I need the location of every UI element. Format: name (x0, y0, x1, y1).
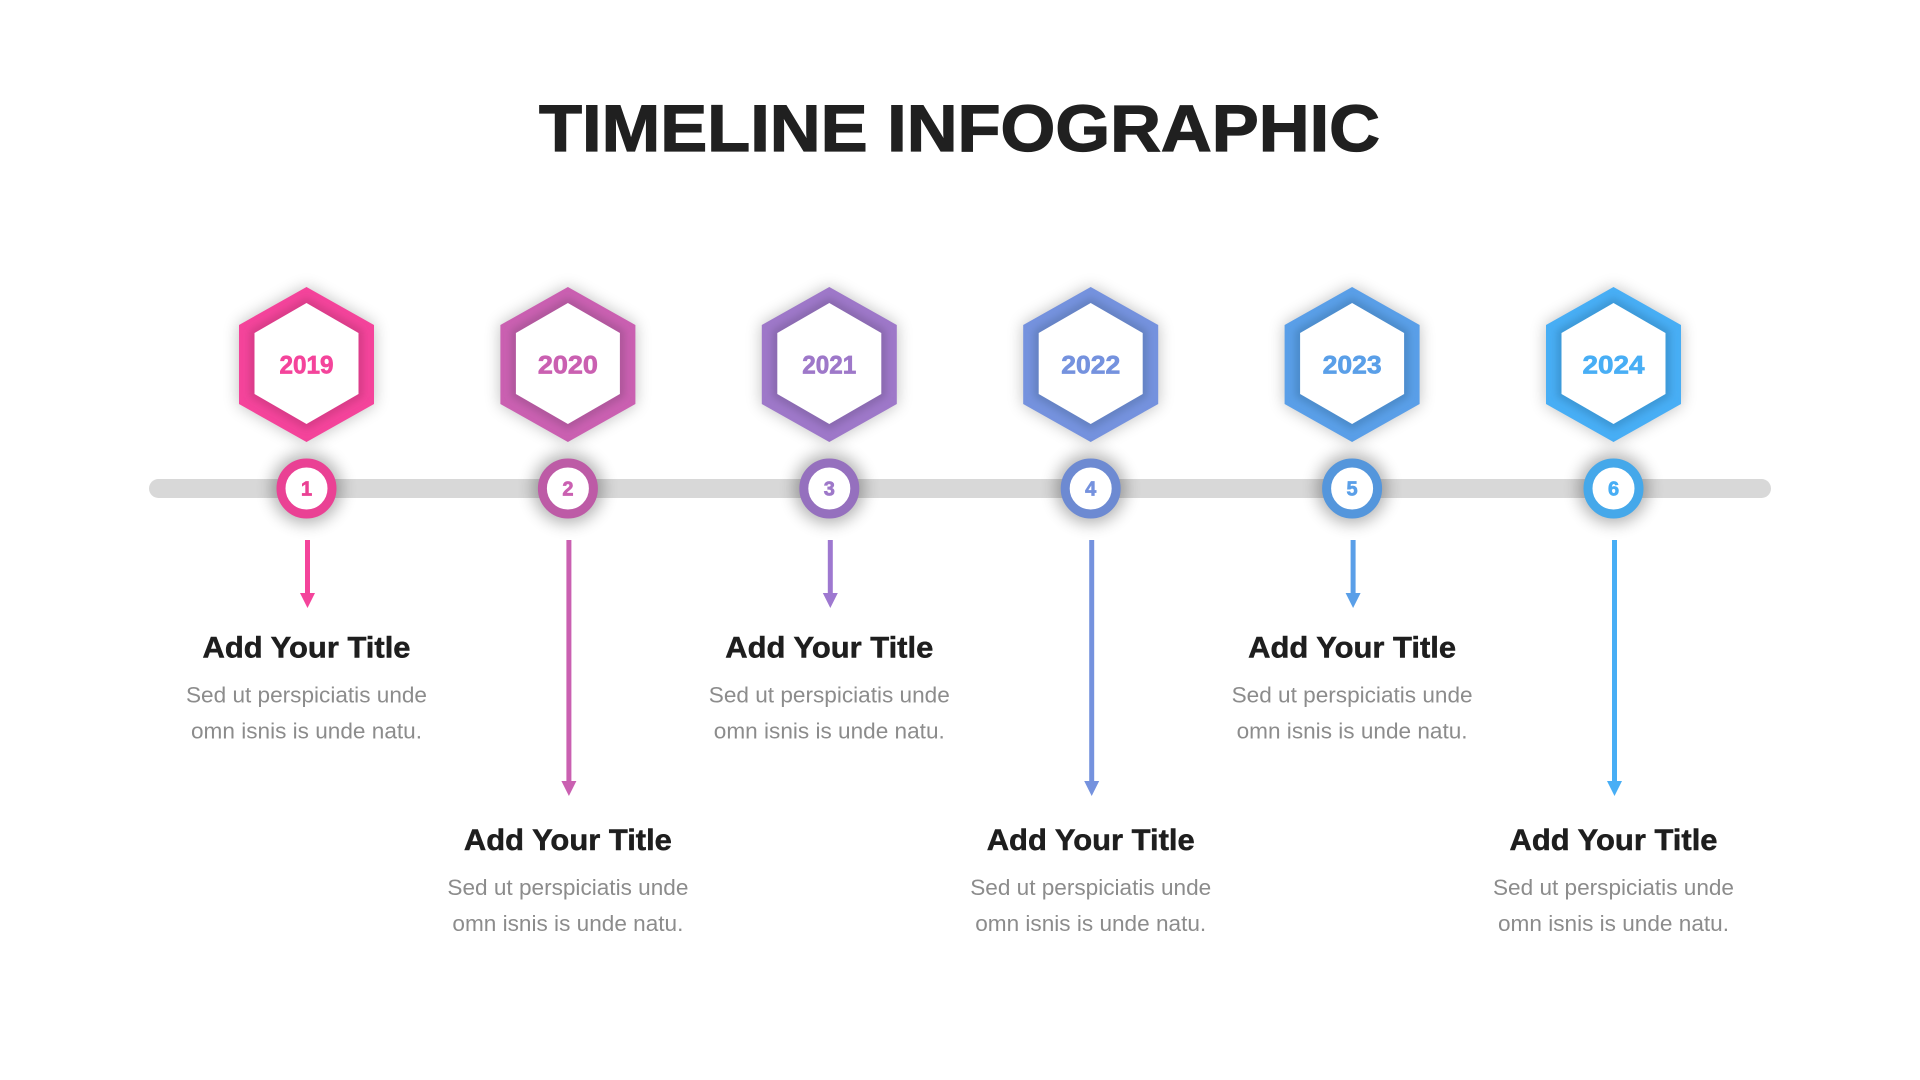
step 2: 2020 (447, 287, 688, 936)
description (1232, 682, 1473, 744)
description: Sed ut perspiciatis unde (1493, 875, 1734, 900)
year label: 2019 (280, 352, 334, 380)
arrow (823, 540, 838, 608)
year label: 2021 (802, 352, 856, 380)
numbered node 6 (1578, 454, 1648, 524)
year label: 2022 (1061, 352, 1120, 380)
hexagon badge 2023 (1285, 287, 1420, 442)
description: Sed ut perspiciatis unde (447, 875, 688, 900)
description (709, 682, 950, 744)
step 5: 2023 (1232, 287, 1473, 744)
numbered node 3: 3 (824, 478, 835, 500)
infographic canvas (149, 104, 1771, 931)
numbered node 4: 4 (1085, 478, 1097, 500)
year label: 2023 (1323, 352, 1382, 380)
description (1493, 875, 1734, 936)
step 4: 2022 (970, 287, 1211, 936)
description: omn isnis is unde natu. (714, 718, 945, 744)
numbered node 2: 2 (562, 478, 573, 500)
numbered node 6: 6 (1608, 478, 1619, 500)
numbered node 5 (1317, 454, 1387, 524)
hexagon badge 2022 (1023, 287, 1158, 442)
arrow (1084, 540, 1099, 796)
description: Sed ut perspiciatis unde (1232, 682, 1473, 708)
hexagon badge 2019 (239, 287, 374, 442)
description: Sed ut perspiciatis unde (186, 682, 427, 708)
heading: Add Your Title (1510, 824, 1718, 857)
heading: Add Your Title (725, 632, 933, 664)
numbered node 1 (272, 454, 342, 524)
description (970, 875, 1211, 936)
description (186, 682, 427, 744)
heading: Add Your Title (987, 824, 1195, 857)
arrow (561, 540, 576, 796)
description: omn isnis is unde natu. (191, 718, 422, 744)
step 3: 2021 (709, 287, 950, 744)
heading: Add Your Title (464, 824, 672, 857)
numbered node 1: 1 (301, 478, 312, 500)
step 6: 2024 (1493, 287, 1734, 936)
heading: Add Your Title (1248, 632, 1456, 664)
description: omn isnis is unde natu. (1237, 718, 1468, 744)
description: Sed ut perspiciatis unde (970, 875, 1211, 900)
description (447, 875, 688, 936)
heading: Add Your Title (202, 632, 410, 664)
timeline track (149, 479, 1771, 498)
title: TIMELINE INFOGRAPHIC (539, 91, 1380, 165)
description: omn isnis is unde natu. (1498, 911, 1729, 936)
numbered node 2 (533, 454, 603, 524)
hexagon badge 2024 (1546, 287, 1681, 442)
year label: 2020 (538, 352, 598, 380)
description: Sed ut perspiciatis unde (709, 682, 950, 708)
description: omn isnis is unde natu. (452, 911, 683, 936)
arrow (1346, 540, 1361, 608)
description: omn isnis is unde natu. (975, 911, 1206, 936)
year label: 2024 (1582, 352, 1645, 380)
numbered node 5: 5 (1347, 478, 1358, 500)
arrow (300, 540, 315, 608)
hexagon badge 2020 (500, 287, 635, 442)
step 1: 2019 (186, 287, 427, 744)
hexagon badge 2021 (762, 287, 897, 442)
numbered node 4 (1056, 454, 1126, 524)
arrow (1607, 540, 1622, 796)
numbered node 3 (794, 454, 864, 524)
